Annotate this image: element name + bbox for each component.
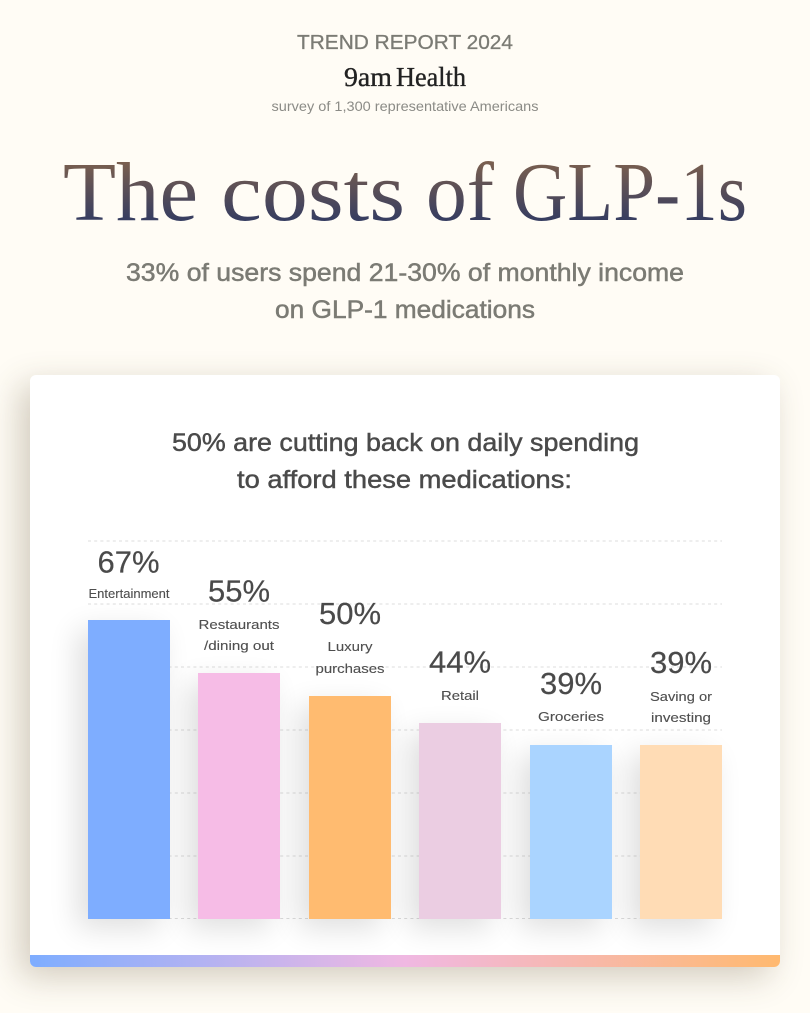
logo: 9am Health: 9am — [344, 62, 392, 92]
bar: Saving or investing 39% — [640, 645, 722, 919]
logo: 9am Health — [344, 62, 466, 92]
bar: Groceries 39%: 39% — [540, 666, 602, 701]
bar: Restaurants/dining out 55%: Restaurants — [198, 617, 280, 632]
bar: Saving or investing 39%: Saving or — [650, 689, 713, 704]
bar: Luxury purchases 50%: purchases — [316, 661, 385, 676]
logo: 9am Health: Health — [396, 62, 466, 92]
bar: Groceries 39%: Groceries — [538, 709, 605, 724]
card heading: to afford these medications: — [237, 466, 572, 494]
eyebrow: report label: TREND REPORT 2024 — [297, 32, 513, 54]
survey note: survey of 1,300 representative Americans — [272, 98, 538, 114]
bar: Retail 44%: Retail — [441, 688, 479, 703]
bar: Retail 44% — [419, 644, 501, 919]
bar: Groceries 39% — [530, 666, 612, 919]
bar: Luxury purchases 50%: Luxury — [328, 639, 373, 654]
bar: Retail 44%: 44% — [429, 644, 491, 680]
title — [63, 146, 747, 239]
bar: Entertainment 67%: Entertainment — [88, 586, 170, 601]
bar: Saving or investing 39%: investing — [651, 710, 711, 725]
title: The — [63, 146, 198, 239]
subtitle: 33% of users spend 21-30% of monthly income — [126, 259, 684, 287]
title: costs — [221, 146, 405, 239]
subtitle — [126, 259, 684, 324]
bar: Entertainment 67% — [88, 544, 170, 919]
bar: Saving or investing 39%: 39% — [650, 645, 712, 680]
bar: Restaurants/dining out 55% — [198, 574, 280, 919]
bar: Luxury purchases 50%: 50% — [319, 596, 381, 631]
subtitle: on GLP-1 medications — [275, 296, 535, 324]
panel: spending card — [20, 375, 780, 977]
title: of — [426, 146, 494, 239]
card heading: 50% are cutting back on daily spending — [172, 429, 639, 457]
bar: Entertainment 67%: 67% — [97, 544, 160, 580]
card heading — [172, 429, 639, 494]
bar: Restaurants/dining out 55%: /dining out — [204, 638, 274, 653]
bar: Luxury purchases 50% — [309, 596, 391, 919]
bar: Restaurants/dining out 55%: 55% — [208, 574, 270, 608]
gradient strip — [30, 955, 780, 967]
title: GLP-1s — [513, 146, 747, 239]
